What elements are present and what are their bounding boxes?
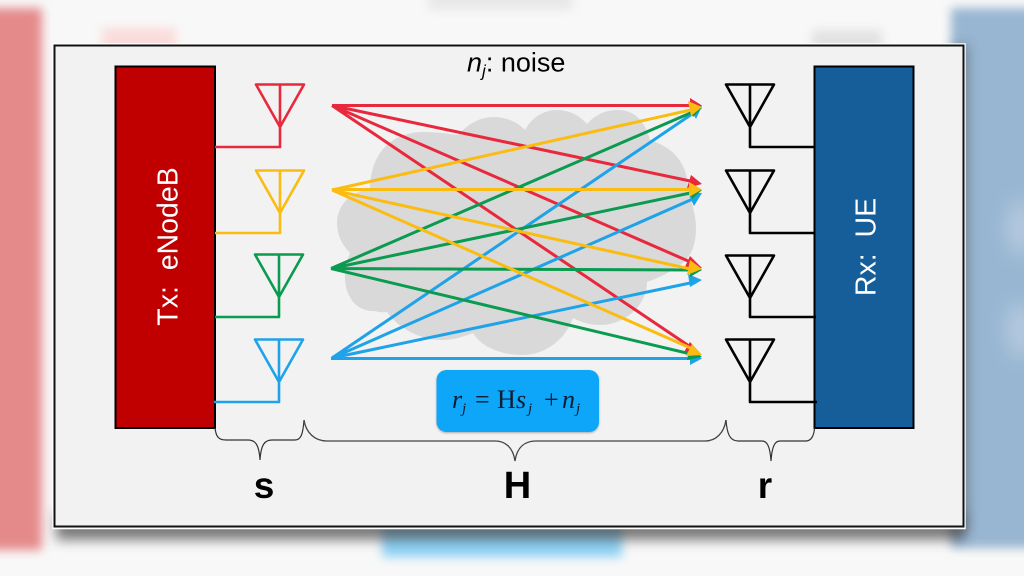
icon: yellow Tx antenna <box>215 170 304 233</box>
brace: s <box>215 420 304 460</box>
noise cloud <box>337 110 696 355</box>
brace: H <box>304 420 726 461</box>
blue arrows <box>331 105 702 365</box>
icon: red Tx antenna <box>215 84 304 147</box>
label: noise: : noise <box>486 48 565 78</box>
channel arrows <box>331 98 702 365</box>
equation box: H <box>497 385 516 414</box>
receive antennas <box>726 84 817 402</box>
label: s: s <box>254 465 274 506</box>
icon: Rx antenna 4 <box>726 340 817 402</box>
block: Tx eNodeB <box>116 66 215 428</box>
label: noise: j <box>480 62 487 80</box>
label: r: r <box>758 465 772 506</box>
red arrows <box>332 98 702 355</box>
block: Rx UE <box>814 66 914 428</box>
label: noise: n <box>467 48 482 78</box>
equation box: j <box>574 401 580 417</box>
block: Tx eNodeB: Tx: eNodeB <box>152 167 184 326</box>
equation box: + <box>544 385 559 414</box>
icon: green Tx antenna <box>215 254 303 317</box>
equation box: s <box>516 385 526 414</box>
equation box <box>436 370 599 432</box>
green arrows <box>331 104 702 360</box>
block: Rx UE: Rx: UE <box>850 198 882 296</box>
equation box: j <box>526 401 532 417</box>
icon: blue Tx antenna <box>214 340 303 402</box>
panel: slide frame <box>53 44 965 528</box>
equation box: n <box>562 385 575 414</box>
brace: r <box>726 420 814 461</box>
transmit antennas <box>214 84 304 402</box>
equation box: r <box>452 385 463 414</box>
label: H: H <box>504 465 531 507</box>
icon: Rx antenna 1 <box>726 84 814 147</box>
icon: Rx antenna 2 <box>726 170 814 233</box>
icon: Rx antenna 3 <box>726 256 816 317</box>
yellow arrows <box>332 101 702 356</box>
equation box: j <box>460 401 466 417</box>
equation box: = <box>475 385 490 414</box>
